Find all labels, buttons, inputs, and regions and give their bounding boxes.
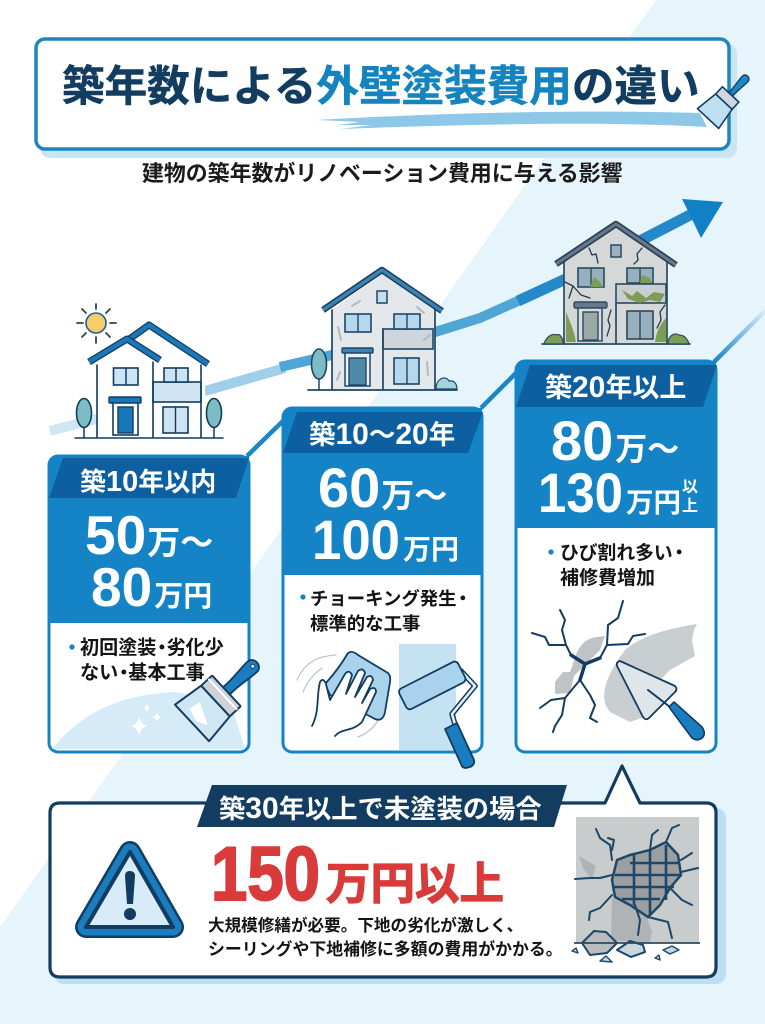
icon: paint roller (398, 660, 475, 768)
title text: 築年数による外壁塗装費用の違い (62, 63, 700, 111)
title panel (36, 39, 737, 158)
ribbon (283, 412, 483, 453)
price second line digits: 100 (312, 508, 400, 571)
panel: card over 20 years (516, 361, 717, 752)
description line 2: シーリングや下地補修に多額の費用がかかる。 (208, 935, 563, 960)
ribbon label: 築20年以上 (545, 371, 686, 404)
small stacked label upper: 以 (682, 473, 698, 497)
paint strip (399, 644, 456, 750)
sparkles (131, 704, 161, 736)
price: 60万〜 (318, 456, 447, 519)
icon: paint brush (175, 644, 274, 741)
icon: title paint brush (697, 66, 758, 128)
subtitle: 建物の築年数がリノベーション費用に与える影響 (142, 157, 623, 188)
panel: warning callout (50, 766, 726, 984)
icon: new house (75, 325, 223, 438)
price second line unit: 万円 (626, 480, 681, 520)
bullet (300, 594, 306, 600)
ribbon (49, 458, 249, 498)
big red amount: 150 (211, 832, 320, 917)
icon: wiping hand with cloth (297, 652, 390, 737)
icon: warning triangle (86, 852, 173, 927)
icon: exposed rebar (572, 817, 700, 962)
swoosh (52, 692, 245, 749)
icon: wall crack (532, 601, 645, 732)
description line 2: 標準的な工事 (310, 610, 420, 636)
amount unit: 万円以上 (326, 847, 504, 912)
ribbon (516, 365, 717, 407)
icon: deteriorated house (542, 224, 690, 344)
callout heading: 築30年以上で未塗装の場合 (219, 792, 542, 825)
panel: card under 10 years (49, 456, 274, 752)
icon: trowel (604, 624, 704, 740)
bullet (548, 549, 554, 555)
icon: sun (77, 304, 116, 343)
price second line: 80万円 (91, 556, 212, 618)
bullet text (69, 644, 75, 650)
price second line digits: 130 (538, 461, 623, 524)
small stacked label lower: 上 (682, 492, 698, 516)
connector lines (247, 311, 765, 456)
description line 1: チョーキング発生・ (310, 585, 472, 611)
callout ribbon (197, 785, 567, 827)
description line 2: ない・基本工事 (80, 657, 205, 685)
panel: card 10 to 20 years (283, 408, 483, 768)
description line 1: 大規模修繕が必要。下地の劣化が激しく、 (208, 912, 523, 936)
description line 1: ひび割れ多い・ (560, 538, 688, 565)
description line 2: 補修費増加 (560, 563, 655, 590)
description line 1: 初回塗装・劣化少 (80, 632, 224, 660)
title brush stroke (317, 112, 707, 129)
price: 50万〜 (85, 504, 213, 566)
price: 80万〜 (551, 409, 679, 472)
ribbon label: 築10〜20年 (309, 418, 455, 451)
icon: aging house (308, 270, 457, 390)
price second line unit: 万円 (403, 528, 459, 568)
rising cost arrow (50, 199, 723, 431)
ribbon label: 築10年以内 (80, 466, 216, 498)
